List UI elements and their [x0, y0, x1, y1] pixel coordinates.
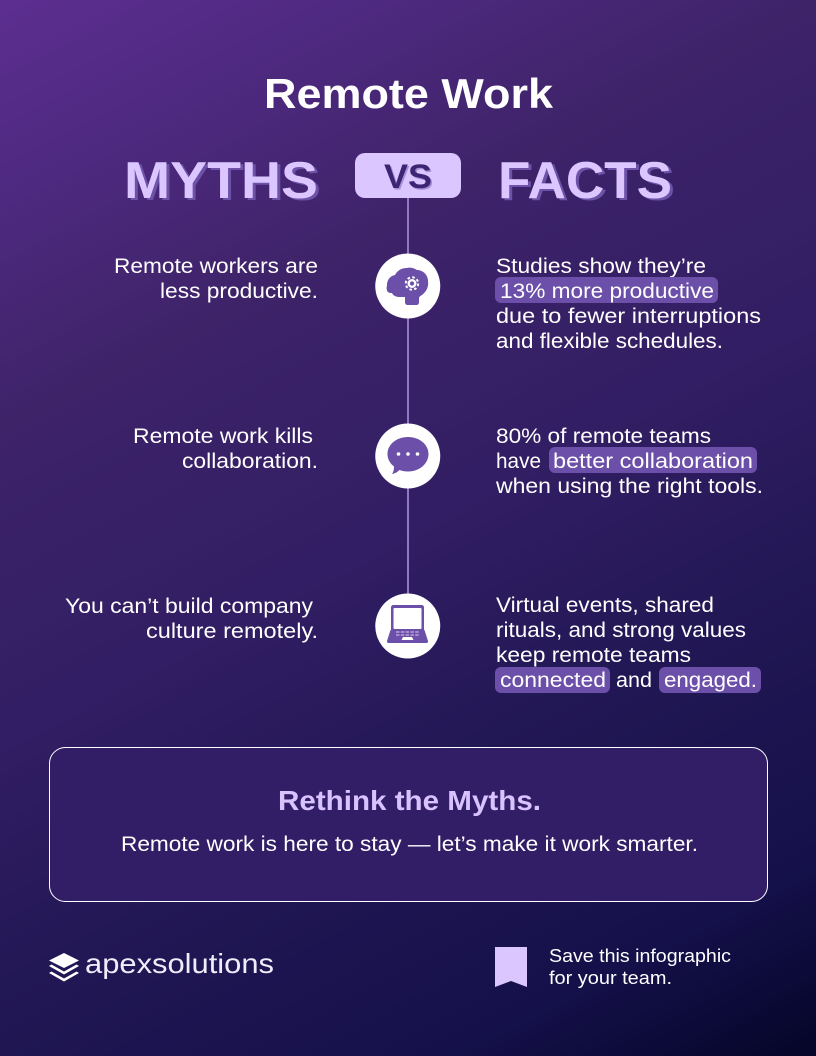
fact 1: and flexible schedules. — [496, 330, 723, 353]
fact 3 — [495, 594, 761, 693]
myth 1: less productive. — [160, 280, 318, 303]
fact 1: Studies show they’re — [496, 255, 706, 278]
panel: call to action — [50, 748, 768, 902]
logo: apexsolutions: apexsolutions — [85, 948, 274, 979]
text: save note: Save this infographic — [549, 946, 731, 966]
fact 3: connected — [500, 669, 606, 692]
fact 3: keep remote teams — [496, 644, 691, 667]
myth 1: Remote workers are — [114, 255, 318, 278]
fact 2: when using the right tools. — [495, 475, 763, 498]
myth 3: culture remotely. — [146, 620, 318, 643]
myth 3: You can’t build company — [65, 595, 314, 618]
fact 3: and — [616, 669, 652, 692]
text: save note — [549, 946, 731, 988]
myth 3 — [65, 595, 318, 643]
icon: bookmark — [495, 947, 527, 987]
icon: laptop — [375, 594, 440, 658]
fact 3: rituals, and strong values — [496, 619, 746, 642]
fact 2 — [495, 425, 763, 498]
myth 2: Remote work kills — [133, 425, 313, 448]
badge: vs: VS — [386, 160, 434, 198]
text: save note: for your team. — [549, 968, 672, 988]
heading: myths: MYTHS — [124, 152, 318, 210]
fact 1: due to fewer interruptions — [496, 305, 761, 328]
heading: facts: FACTS — [501, 154, 675, 212]
fact 1 — [495, 255, 761, 353]
myth 2: collaboration. — [182, 450, 318, 473]
heading: facts: FACTS — [498, 152, 672, 210]
timeline line — [407, 195, 409, 600]
fact 3: Virtual events, shared — [496, 594, 714, 617]
fact 3: engaged. — [664, 669, 757, 692]
fact 2: 80% of remote teams — [496, 425, 711, 448]
heading: rethink the myths: Rethink the Myths. — [278, 785, 541, 816]
fact 1: 13% more productive — [500, 280, 714, 303]
icon: chat bubble — [375, 424, 440, 488]
fact 2: better collaboration — [553, 450, 753, 473]
badge: vs: VS — [384, 158, 432, 196]
fact 2: have — [496, 450, 541, 473]
myth 1 — [114, 255, 318, 303]
myth 2 — [133, 425, 318, 473]
badge: vs — [355, 153, 461, 198]
icon: brain with gear — [375, 254, 440, 318]
heading: myths: MYTHS — [127, 154, 321, 212]
title: Remote Work — [264, 70, 554, 117]
text: call to action message: Remote work is here to stay — let’s make it work smarter. — [121, 833, 698, 856]
